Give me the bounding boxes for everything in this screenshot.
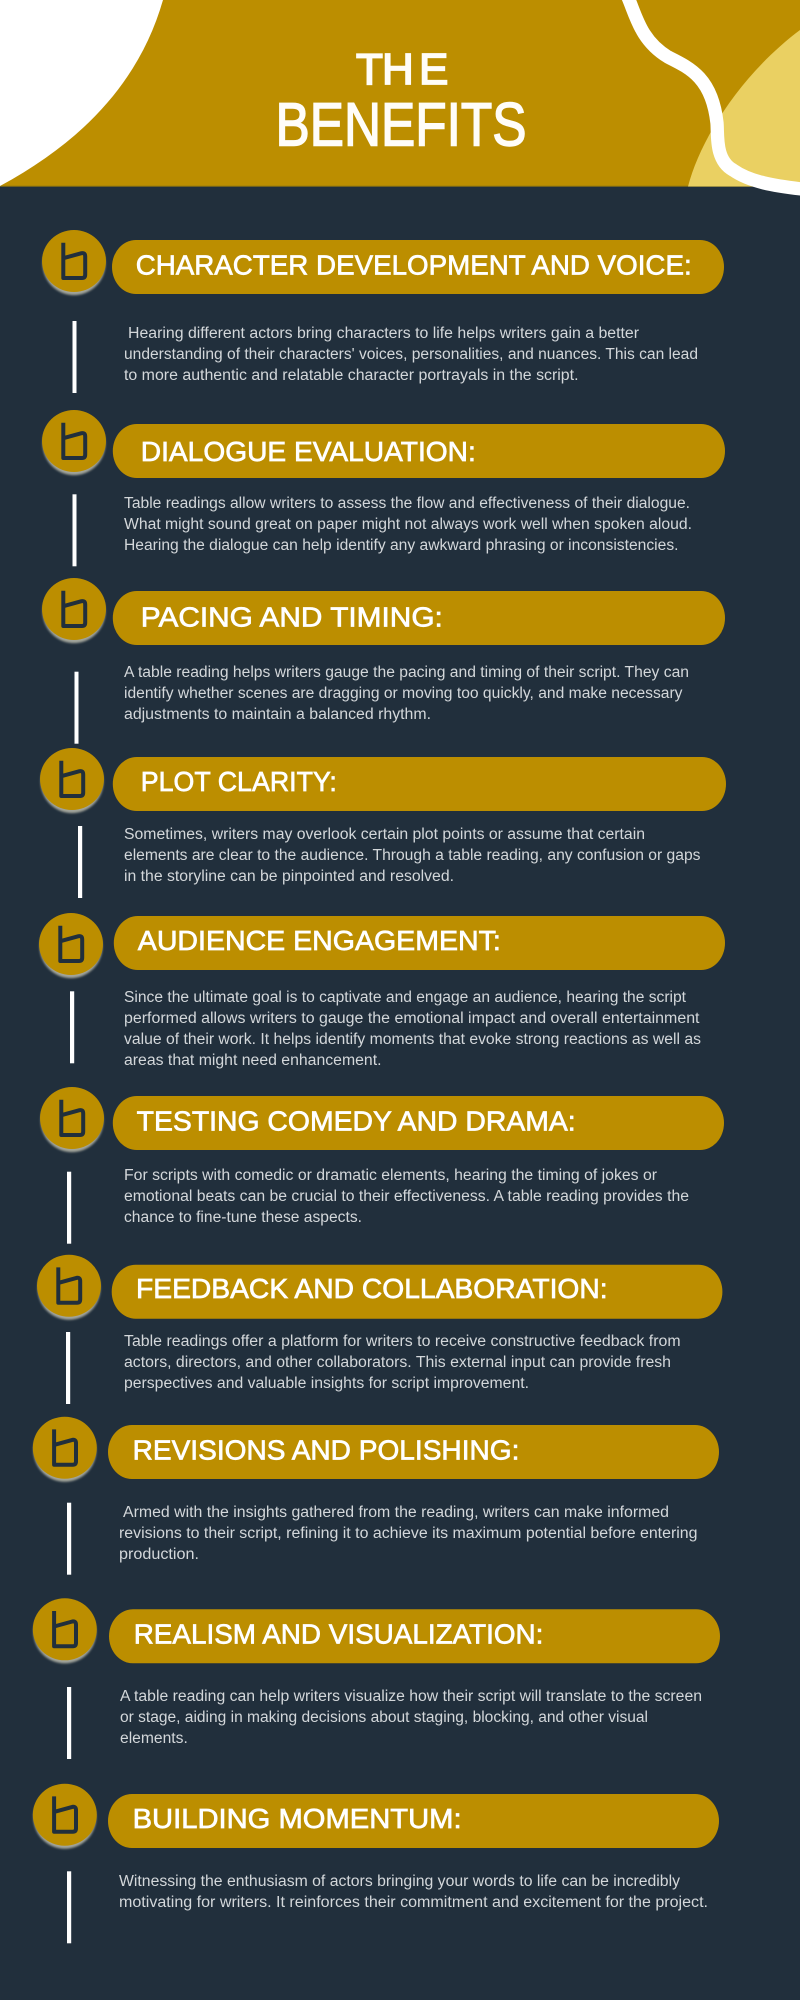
title: BENEFITS <box>276 91 526 159</box>
heading: PLOT CLARITY: <box>141 766 337 797</box>
panel: testing comedy and drama <box>40 1087 724 1244</box>
heading: FEEDBACK AND COLLABORATION: <box>136 1273 608 1304</box>
connector line <box>67 1172 71 1244</box>
white corner shape <box>0 0 163 186</box>
body text: emotional beats can be crucial to their effectiveness. A table reading provides the <box>124 1188 689 1205</box>
heading pill <box>112 240 724 294</box>
body text: elements are clear to the audience. Through a table reading, any confusion or gaps <box>124 847 701 864</box>
panel: character development and voice <box>42 230 724 393</box>
body text: motivating for writers. It reinforces their commitment and excitement for the project. <box>119 1894 708 1911</box>
heading pill <box>108 1794 719 1848</box>
connector line <box>72 494 76 566</box>
icon: b logo <box>42 578 106 643</box>
heading pill <box>108 1425 719 1479</box>
header band <box>0 0 800 189</box>
body text: Since the ultimate goal is to captivate and engage an audience, hearing the script <box>124 989 687 1006</box>
heading: REVISIONS AND POLISHING: <box>133 1434 519 1465</box>
body text <box>124 1333 681 1392</box>
body text: What might sound great on paper might not always work well when spoken aloud. <box>124 516 692 533</box>
body text: in the storyline can be pinpointed and resolved. <box>124 868 454 885</box>
body text: to more authentic and relatable character portrayals in the script. <box>124 367 578 384</box>
body text: A table reading helps writers gauge the pacing and timing of their script. They can <box>124 664 689 681</box>
icon: b logo <box>42 410 106 475</box>
heading: BUILDING MOMENTUM: <box>133 1803 462 1834</box>
body text: A table reading can help writers visualize how their script will translate to the screen <box>120 1688 702 1705</box>
body text: perspectives and valuable insights for script improvement. <box>124 1375 529 1392</box>
body text <box>119 1504 698 1563</box>
body text: Hearing the dialogue can help identify any awkward phrasing or inconsistencies. <box>124 537 678 554</box>
heading pill <box>113 757 726 811</box>
panel: realism and visualization <box>33 1598 720 1759</box>
connector line <box>67 1687 71 1759</box>
body text <box>124 325 698 384</box>
body text: revisions to their script, refining it to achieve its maximum potential before entering <box>119 1525 698 1542</box>
panel: revisions and polishing <box>33 1417 719 1575</box>
connector line <box>78 826 82 898</box>
connector line <box>67 1503 71 1575</box>
body text: Table readings allow writers to assess the flow and effectiveness of their dialogue. <box>124 495 690 512</box>
body text: chance to fine-tune these aspects. <box>124 1209 362 1226</box>
heading: TESTING COMEDY AND DRAMA: <box>137 1106 576 1137</box>
connector line <box>67 1871 71 1943</box>
body text <box>124 989 701 1069</box>
body text: For scripts with comedic or dramatic elements, hearing the timing of jokes or <box>124 1167 657 1184</box>
body text: Witnessing the enthusiasm of actors bringing your words to life can be incredibly <box>119 1873 680 1890</box>
body text: adjustments to maintain a balanced rhythm. <box>124 706 431 723</box>
icon: b logo <box>33 1598 97 1663</box>
body text: performed allows writers to gauge the emotional impact and overall entertainment <box>124 1010 700 1027</box>
heading: PACING AND TIMING: <box>141 602 443 633</box>
icon: b logo <box>33 1784 97 1849</box>
icon: b logo <box>33 1417 97 1482</box>
body text: Table readings offer a platform for writers to receive constructive feedback from <box>124 1333 681 1350</box>
body text: Sometimes, writers may overlook certain plot points or assume that certain <box>124 826 645 843</box>
body text <box>124 664 689 723</box>
heading pill <box>114 916 725 970</box>
body text <box>120 1688 702 1747</box>
body text: Armed with the insights gathered from the reading, writers can make informed <box>123 1504 669 1521</box>
panel: dialogue evaluation <box>42 410 725 566</box>
heading pill <box>112 1265 722 1319</box>
white wave <box>627 0 800 189</box>
body text <box>124 826 701 885</box>
panel: audience engagement <box>39 913 725 1069</box>
panel: feedback and collaboration <box>37 1255 722 1404</box>
body text <box>124 1167 689 1226</box>
heading: DIALOGUE EVALUATION: <box>141 436 476 467</box>
body text: elements. <box>120 1730 188 1747</box>
body text: identify whether scenes are dragging or moving too quickly, and make necessary <box>124 685 683 702</box>
connector line <box>72 321 76 393</box>
heading: AUDIENCE ENGAGEMENT: <box>138 925 501 956</box>
panel: plot clarity <box>40 748 726 898</box>
icon: b logo <box>40 1087 104 1152</box>
heading: CHARACTER DEVELOPMENT AND VOICE: <box>136 250 692 281</box>
body text: Hearing different actors bring characters to life helps writers gain a better <box>128 325 639 342</box>
body text: understanding of their characters' voices, personalities, and nuances. This can lead <box>124 346 698 363</box>
connector line <box>70 991 74 1063</box>
icon: b logo <box>37 1255 101 1320</box>
heading pill <box>113 591 725 645</box>
title: THE <box>356 45 448 94</box>
panel: building momentum <box>33 1784 719 1943</box>
heading pill <box>109 1609 720 1663</box>
body text: value of their work. It helps identify moments that evoke strong reactions as well as <box>124 1031 701 1048</box>
panel: pacing and timing <box>42 578 725 744</box>
body text <box>119 1873 708 1911</box>
heading: REALISM AND VISUALIZATION: <box>134 1618 543 1649</box>
connector line <box>66 1332 70 1404</box>
heading pill <box>113 424 725 478</box>
connector line <box>74 672 78 744</box>
body text: or stage, aiding in making decisions about staging, blocking, and other visual <box>120 1709 648 1726</box>
yellow corner shape <box>688 30 800 186</box>
icon: b logo <box>40 748 104 813</box>
heading pill <box>113 1096 724 1150</box>
body text: areas that might need enhancement. <box>124 1052 382 1069</box>
icon: b logo <box>39 913 103 978</box>
body text: production. <box>119 1546 199 1563</box>
body text: actors, directors, and other collaborators. This external input can provide fresh <box>124 1354 671 1371</box>
title <box>276 45 526 159</box>
body text <box>124 495 692 554</box>
icon: b logo <box>42 230 106 295</box>
